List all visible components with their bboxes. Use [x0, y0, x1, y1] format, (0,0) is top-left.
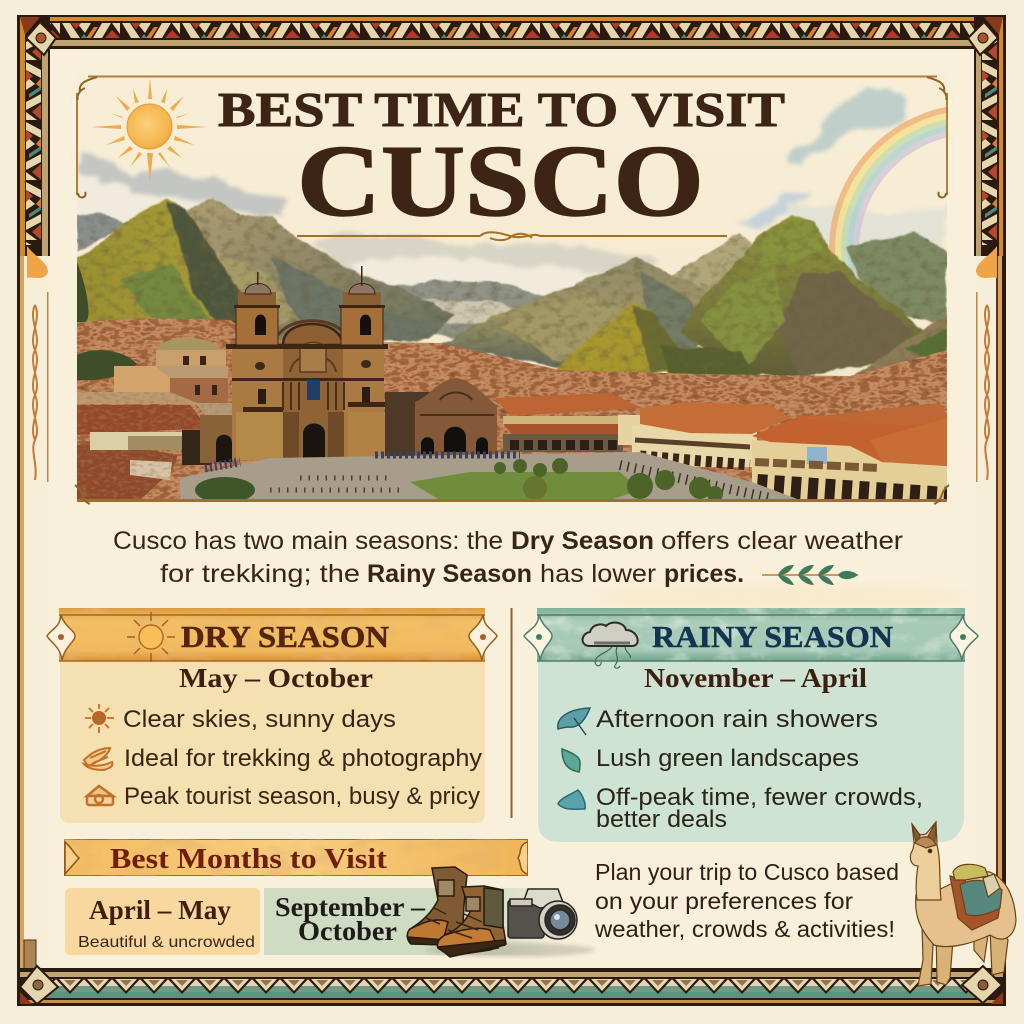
clouds right [735, 92, 947, 255]
dry season banner [47, 608, 497, 661]
intro text: offers clear weather [661, 527, 903, 555]
trees [195, 458, 723, 503]
left dome building [114, 338, 228, 404]
cathedral [226, 266, 388, 460]
right boot [426, 886, 506, 957]
hero illustration [77, 85, 947, 499]
side rails [17, 256, 1006, 970]
dry item 3: Peak tourist season, busy & pricy [124, 783, 480, 810]
icon: trekking [84, 748, 113, 770]
llama neck and head [910, 822, 941, 900]
panel: dry season [47, 608, 497, 823]
windows and door [255, 360, 371, 458]
title: BEST TIME TO VISIT [218, 82, 785, 137]
right bell tower [339, 266, 385, 345]
month box: september october: September – [275, 892, 426, 922]
bottom border band [17, 968, 1006, 1006]
left wall under roof [90, 415, 236, 465]
top border band [17, 15, 1006, 49]
section divider [510, 608, 512, 818]
main green mountains [77, 198, 947, 385]
left border band [17, 15, 50, 256]
picture frame lines [75, 76, 949, 504]
panel: best months [64, 839, 564, 955]
corner diamond bottom right [962, 966, 1003, 1004]
vine ornament left [33, 305, 37, 480]
ground shadow [425, 943, 595, 957]
clouds left and centre [78, 154, 660, 300]
left boot [407, 867, 467, 945]
intro text: for trekking; the [160, 560, 360, 588]
icon: small sun [85, 704, 114, 733]
closing text [594, 859, 899, 942]
closing text: on your preferences for [595, 888, 853, 914]
month box: april may: April – May [89, 895, 231, 925]
icon: llama [910, 822, 1016, 986]
month box: april may [65, 888, 260, 955]
frame scroll ornaments [75, 77, 949, 504]
best months banner: Best Months to Visit [110, 843, 387, 875]
intro text [113, 527, 903, 588]
dry item 1: Clear skies, sunny days [123, 706, 396, 733]
rainy season heading: RAINY SEASON [652, 619, 893, 654]
icon: camera [508, 889, 577, 939]
plaza [180, 452, 800, 500]
orange leaf right [976, 246, 997, 278]
icon: rock leaf [558, 790, 585, 809]
rainy item 3: Off-peak time, fewer crowds, [596, 784, 923, 811]
best months banner [64, 839, 528, 876]
right border band [974, 15, 1006, 256]
title: CUSCO [297, 125, 704, 238]
rainy season body [538, 660, 964, 842]
rainy item 3: better deals [596, 806, 727, 833]
month box: april may: Beautiful & uncrowded [78, 934, 255, 951]
corner diamond bottom left [20, 966, 58, 1004]
cathedral facade [232, 345, 384, 460]
vine ornament right [985, 305, 989, 480]
dry item 2: Ideal for trekking & photography [124, 745, 482, 772]
rainy season dates: November – April [644, 663, 868, 693]
title divider [297, 232, 727, 240]
closing text: Plan your trip to Cusco based [595, 859, 899, 885]
intro text: Dry Season [511, 527, 654, 555]
second church [385, 378, 497, 458]
icon: banner sun [127, 612, 175, 662]
facade central gable [278, 321, 346, 372]
llama body [916, 872, 1016, 947]
dry season heading: DRY SEASON [181, 619, 389, 654]
panel: rainy season [524, 608, 978, 842]
dry season dates: May – October [179, 663, 373, 693]
town texture [77, 318, 947, 500]
dry season body [60, 660, 485, 823]
icon: rain cloud [582, 623, 638, 668]
title [218, 82, 785, 238]
orange leaf left [27, 246, 48, 278]
corner ornament top right [968, 17, 1003, 55]
intro text: Cusco has two main seasons: the [113, 527, 503, 555]
llama pack [960, 880, 1002, 916]
icon: tourist camera [87, 786, 113, 805]
closing text: weather, crowds & activities! [594, 916, 895, 942]
left red roofs [77, 392, 232, 500]
icon: leaf sprig [762, 565, 858, 585]
left bell tower [234, 272, 280, 345]
central arcade roofs [495, 393, 642, 452]
icon: leaf [562, 749, 580, 772]
month box: september october [264, 888, 564, 955]
icon: hiking boots [407, 867, 506, 957]
intro text: prices. [664, 560, 744, 588]
month box: september october: October [298, 916, 397, 946]
intro text: has lower [540, 560, 656, 588]
llama legs [918, 925, 1008, 986]
icon: umbrella [558, 708, 590, 735]
rainbow [829, 106, 946, 280]
llama saddle [950, 876, 1000, 930]
far mountains [77, 212, 947, 345]
rainy item 3 [596, 784, 923, 833]
rainy item 1: Afternoon rain showers [596, 706, 878, 733]
rainy item 2: Lush green landscapes [596, 745, 859, 772]
right side buildings [618, 402, 947, 500]
dark trees left [77, 262, 137, 380]
icon: sun [91, 78, 207, 181]
corner ornament top left [20, 17, 56, 55]
cornices [226, 344, 388, 412]
rainy season banner [524, 608, 978, 661]
intro text: Rainy Season [367, 560, 532, 588]
mid mountains [180, 198, 740, 368]
